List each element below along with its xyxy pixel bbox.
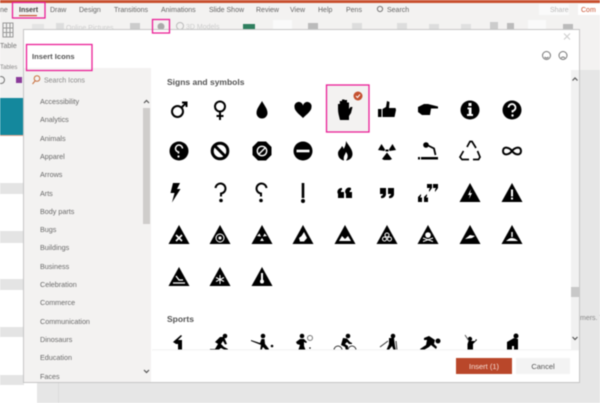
icon: warning slippery xyxy=(460,225,480,244)
ribbon tabs: Transitions xyxy=(114,7,148,14)
slide thumbnails panel xyxy=(0,70,59,403)
icon: female xyxy=(215,102,225,120)
ribbon tabs: Slide Show xyxy=(209,7,245,14)
cancel button xyxy=(516,358,570,374)
sidebar scrollbar xyxy=(143,100,150,372)
icon: closing quotes xyxy=(380,188,394,198)
category list: Arts xyxy=(40,189,53,198)
icon: reversed question circle xyxy=(170,142,188,160)
search field: Search Icons xyxy=(44,78,85,84)
category list: Faces xyxy=(40,372,60,381)
icon: drop xyxy=(256,101,268,118)
highlight: dialog heading xyxy=(26,44,92,70)
category list: Body parts xyxy=(40,207,75,216)
icon: male xyxy=(172,102,186,117)
ribbon xyxy=(0,20,600,71)
icon: warning radiation xyxy=(252,225,272,244)
category sidebar xyxy=(24,68,151,382)
icon: lightning xyxy=(170,183,180,202)
icon: sport tennis xyxy=(296,334,312,351)
ribbon tabs: Share xyxy=(550,7,569,14)
section heading: sports: Sports xyxy=(167,314,194,324)
icon: flame xyxy=(338,141,352,160)
section heading: signs and symbols: Signs and symbols xyxy=(167,77,245,87)
ribbon: Online Pictures xyxy=(66,25,114,32)
ribbon tabs: ne xyxy=(0,7,8,14)
insert button: Insert (1) xyxy=(469,362,500,371)
icon: warning bump xyxy=(502,225,522,244)
icon: question mark xyxy=(216,184,225,202)
highlight: selected icon xyxy=(326,85,369,132)
icon: warning cross xyxy=(168,225,190,244)
feedback smileys xyxy=(542,52,567,60)
icon: reversed question mark xyxy=(257,184,266,202)
icon: exclamation xyxy=(301,183,305,203)
category list: Dinosaurs xyxy=(40,335,73,344)
icon: sport runner xyxy=(210,334,228,351)
ribbon tabs xyxy=(0,3,600,20)
category list: Commerce xyxy=(40,298,75,307)
icon: sport cricket xyxy=(251,334,273,351)
icon: sport figure 1 xyxy=(173,335,182,353)
ribbon tabs: Search xyxy=(387,7,409,14)
category list: Accessibility xyxy=(40,97,80,106)
ribbon tabs: Com xyxy=(581,7,596,14)
ribbon tabs: Draw xyxy=(50,7,67,14)
ribbon: Tables xyxy=(0,65,17,71)
category list: Bugs xyxy=(40,225,57,234)
ribbon tabs: Animations xyxy=(161,7,196,14)
ribbon tabs: Insert xyxy=(19,7,39,14)
icon: smoking xyxy=(418,142,438,160)
title bar accent xyxy=(0,0,600,3)
category list: Apparel xyxy=(40,152,65,161)
ribbon tabs: View xyxy=(290,7,306,14)
category list: Arrows xyxy=(40,170,63,179)
close button xyxy=(564,34,570,40)
category list: Business xyxy=(40,262,70,271)
icon: warning electric xyxy=(460,183,480,202)
icon: hand xyxy=(338,100,352,120)
icon: warning fire xyxy=(292,225,314,244)
icon: infinity xyxy=(503,148,521,154)
insert button xyxy=(456,358,512,374)
ribbon: 3D Models xyxy=(186,24,220,31)
category list: Animals xyxy=(40,134,66,143)
icon: sport cycling xyxy=(334,334,356,354)
icon: no sign octagon xyxy=(252,142,272,160)
selected icon tile xyxy=(327,85,369,132)
icon: radiation xyxy=(378,144,396,160)
main scrollbar xyxy=(571,70,579,350)
cancel button: Cancel xyxy=(531,362,555,371)
icon: warning biohazard xyxy=(376,225,398,244)
icon: sport weightlifter xyxy=(507,334,518,351)
icon: recycle xyxy=(460,142,480,160)
icon: opening quotes xyxy=(337,188,352,198)
ribbon tabs: Help xyxy=(318,7,333,14)
category list xyxy=(40,97,90,381)
category list: Celebration xyxy=(40,280,77,289)
category list: Buildings xyxy=(40,243,70,252)
footer divider xyxy=(152,348,579,351)
category list: Education xyxy=(40,353,72,362)
category list: Analytics xyxy=(40,115,69,124)
icon: paired quotes xyxy=(418,184,438,202)
ribbon tabs: Pens xyxy=(346,7,362,14)
highlight: icons button xyxy=(152,20,170,33)
category list: Communication xyxy=(40,317,90,326)
icon: heart xyxy=(294,102,312,118)
icon: warning wet floor xyxy=(168,267,190,286)
dialog heading: Insert Icons xyxy=(32,52,75,61)
sports icon row xyxy=(172,332,520,350)
icon: warning snowflake xyxy=(210,267,230,286)
ribbon: Table xyxy=(0,43,17,50)
icon: warning explosion xyxy=(334,225,356,244)
icon: sport hiking xyxy=(380,334,397,351)
icon: prohibited xyxy=(212,143,228,159)
icon: question circle xyxy=(502,100,522,120)
icon: check badge xyxy=(354,92,362,100)
ribbon tabs: Review xyxy=(256,7,280,14)
icon: warning exclamation xyxy=(502,183,522,202)
icon: pointing hand xyxy=(418,104,438,115)
highlight: insert tab xyxy=(12,2,45,18)
search field xyxy=(32,76,85,84)
icon: information xyxy=(460,100,480,120)
ribbon tabs: Design xyxy=(79,7,101,14)
icon: sport golf xyxy=(465,335,477,351)
icon: warning thermometer xyxy=(252,267,272,286)
icon: warning skull xyxy=(418,225,438,244)
icon: warning no symbol xyxy=(210,225,230,244)
icon: thumbs up xyxy=(378,101,396,117)
icon: sport skiing xyxy=(420,336,440,351)
icon: no entry xyxy=(294,142,312,160)
